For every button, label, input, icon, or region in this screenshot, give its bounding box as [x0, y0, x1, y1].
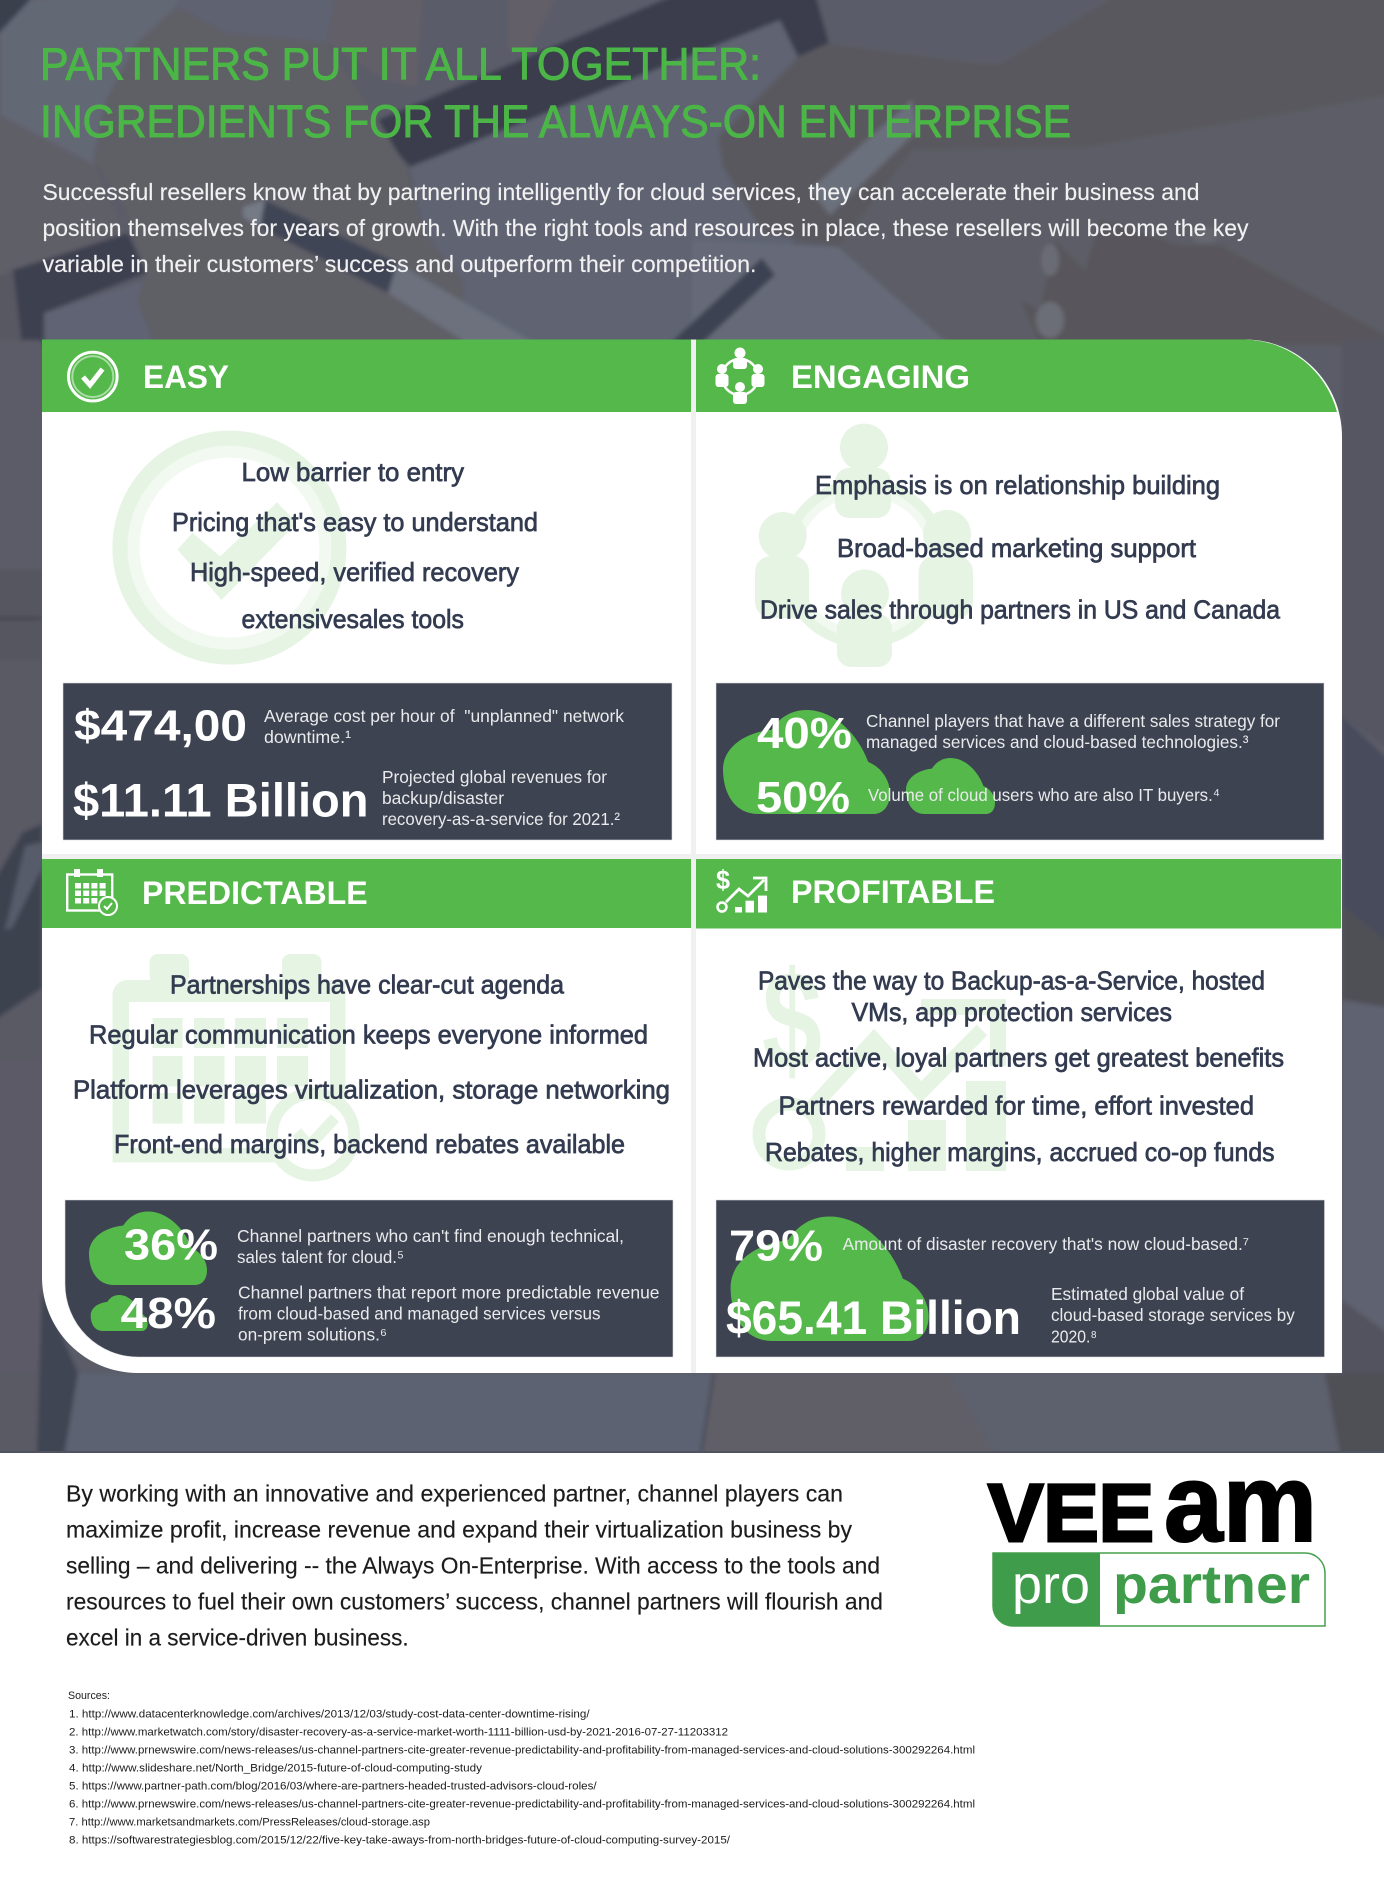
icon: large cloud — [89, 1212, 207, 1285]
predictable bullet list — [73, 970, 670, 1159]
engaging stats box — [716, 683, 1324, 840]
engaging bullet list: Drive sales through partners in US and Canada — [760, 594, 1281, 624]
stat description: sales strategy: managed services and cloud-based technologies.³ — [866, 732, 1249, 752]
white panel card — [42, 340, 1342, 1373]
panel: profitable — [696, 859, 1341, 1357]
title — [40, 38, 1071, 147]
logo: veeam pro partner: VEE — [988, 1468, 1154, 1559]
closing paragraph — [66, 1481, 883, 1651]
engaging bullet list: Emphasis is on relationship building — [815, 470, 1220, 500]
stat description: downtime — [264, 706, 624, 747]
stat description: revenues: Projected global revenues for — [382, 767, 607, 787]
panel: easy — [42, 340, 691, 840]
logo: veeam pro partner: pro — [1012, 1555, 1090, 1615]
sources list: 4. http://www.slideshare.net/North_Bridge/2015-future-of-cloud-computing-study — [69, 1762, 483, 1774]
stat: 50 percent: 50% — [756, 773, 850, 822]
stat: 36 percent: 36% — [124, 1220, 218, 1270]
panel: predictable — [42, 859, 691, 1357]
stat: 79 percent: 79% — [729, 1222, 823, 1270]
sources list: 7. http://www.marketsandmarkets.com/PressReleases/cloud-storage.asp — [69, 1816, 430, 1828]
icon: large cloud — [731, 1216, 929, 1341]
easy bullet list: Low barrier to entry — [242, 457, 464, 487]
stat description: storage value: cloud-based storage services by — [1051, 1305, 1295, 1325]
profitable bullet list: Most active, loyal partners get greatest benefits — [753, 1042, 1284, 1072]
icon: small cloud — [906, 758, 995, 814]
icon: small cloud — [91, 1295, 148, 1331]
predictable stats box — [65, 1200, 673, 1357]
engaging bullet list — [760, 470, 1281, 624]
sources list — [68, 1690, 975, 1846]
watermark: check circle — [112, 431, 346, 665]
easy header bar — [42, 340, 691, 412]
icon: large cloud — [723, 710, 890, 814]
predictable bullet list: Regular communication keeps everyone informed — [89, 1020, 648, 1050]
predictable heading: PREDICTABLE — [142, 875, 368, 911]
sources list: 6. http://www.prnewswire.com/news-releases/us-channel-partners-cite-greater-revenue-predictability-and-profitability-from-managed-services-and-cloud-solutions-300292264.html — [69, 1798, 975, 1810]
predictable bullet list: Partnerships have clear-cut agenda — [170, 970, 565, 1000]
profitable stats box — [716, 1200, 1324, 1357]
stat description: sales strategy: Channel players that have a different sales strategy for — [866, 711, 1280, 731]
easy bullet list: High-speed, verified recovery — [190, 557, 519, 587]
stat description: revenues — [382, 767, 620, 829]
stat description: predictable revenue: from cloud-based and managed services versus — [238, 1304, 601, 1324]
closing paragraph: excel in a service-driven business. — [66, 1625, 409, 1651]
stat description: predictable revenue: on-prem solutions.⁶ — [238, 1324, 387, 1344]
predictable header bar — [42, 859, 691, 928]
easy bullet list: Pricing that's easy to understand — [172, 507, 538, 537]
profitable bullet list — [753, 966, 1284, 1167]
sources list: 8. https://softwarestrategiesblog.com/2015/12/22/five-key-take-aways-from-north-bridges-future-of-cloud-computing-survey-2015/ — [69, 1834, 731, 1846]
profitable bullet list: Partners rewarded for time, effort invested — [778, 1090, 1254, 1120]
stat description: storage value — [1051, 1284, 1295, 1346]
engaging heading: ENGAGING — [791, 359, 970, 395]
margins — [0, 340, 42, 570]
icon: people circle — [716, 348, 764, 404]
stat description: technical talent — [237, 1226, 624, 1267]
title: INGREDIENTS FOR THE ALWAYS-ON ENTERPRISE — [40, 96, 1071, 147]
icon: check circle — [68, 352, 117, 401]
icon: dollar and growth chart: $ — [716, 865, 730, 895]
watermark: dollar and growth chart: $ — [762, 943, 822, 1098]
stat: 40 percent: 40% — [757, 709, 852, 758]
intro paragraph: Successful resellers know that by partnering intelligently for cloud services, they can accelerate their business and — [42, 179, 1200, 205]
profitable bullet list: VMs, app protection services — [852, 997, 1172, 1027]
logo: veeam pro partner: partner — [1113, 1555, 1310, 1615]
engaging bullet list: Broad-based marketing support — [837, 533, 1197, 563]
predictable bullet list: Front-end margins, backend rebates available — [114, 1129, 625, 1159]
stat: 11.11 billion: $11.11 Billion — [73, 774, 368, 826]
watermark: people circle — [755, 424, 973, 667]
intro paragraph: variable in their customers’ success and outperform their competition. — [42, 251, 756, 277]
sources list: 5. https://www.partner-path.com/blog/2016/03/where-are-partners-headed-trusted-advisors-cloud-roles/ — [69, 1780, 598, 1792]
icon: calendar — [67, 869, 117, 915]
profitable header bar — [696, 859, 1341, 928]
stat description: IT buyers: Volume of cloud users who are also IT buyers.⁴ — [868, 785, 1220, 805]
easy heading: EASY — [143, 359, 229, 395]
closing paragraph: selling – and delivering -- the Always On-Enterprise. With access to the tools and — [66, 1553, 880, 1579]
easy bullet list: extensivesales tools — [242, 604, 464, 634]
title: PARTNERS PUT IT ALL TOGETHER: — [40, 38, 761, 90]
easy bullet list — [172, 457, 538, 634]
predictable bullet list: Platform leverages virtualization, storage networking — [73, 1074, 670, 1104]
easy stats box — [63, 683, 672, 840]
stat description: technical talent: Channel partners who can't find enough technical, — [237, 1226, 624, 1246]
closing paragraph: By working with an innovative and experienced partner, channel players can — [66, 1481, 843, 1507]
stat description: downtime: Average cost per hour of "unplanned" network — [264, 706, 624, 726]
stat description: sales strategy — [866, 711, 1280, 752]
stat: 48 percent: 48% — [121, 1289, 216, 1338]
logo: veeam pro partner — [988, 1442, 1325, 1626]
stat description: downtime: downtime.¹ — [264, 727, 351, 747]
profitable heading: PROFITABLE — [791, 874, 995, 910]
closing paragraph: maximize profit, increase revenue and expand their virtualization business by — [66, 1517, 852, 1543]
stat description: disaster recovery: Amount of disaster recovery that's now cloud-based.⁷ — [843, 1234, 1249, 1254]
sources list: 3. http://www.prnewswire.com/news-releases/us-channel-partners-cite-greater-revenue-predictability-and-profitability-from-managed-services-and-cloud-solutions-300292264.html — [69, 1744, 975, 1756]
intro paragraph — [42, 179, 1249, 277]
stat: 65.41 billion: $65.41 Billion — [726, 1291, 1021, 1344]
sources list: 2. http://www.marketwatch.com/story/disaster-recovery-as-a-service-market-worth-1111-billion-usd-by-2021-2016-07-27-11203312 — [69, 1726, 728, 1738]
engaging header bar — [696, 340, 1337, 412]
sources list: 1. http://www.datacenterknowledge.com/archives/2013/12/03/study-cost-data-center-downtime-rising/ — [69, 1708, 591, 1720]
stat description: predictable revenue — [238, 1283, 660, 1344]
watermark: dollar and growth chart — [759, 943, 1006, 1171]
stat description: technical talent: sales talent for cloud.⁵ — [237, 1247, 404, 1267]
stat description: revenues: backup/disaster — [382, 788, 504, 808]
sources list: Sources: — [68, 1690, 110, 1702]
watermark: calendar — [112, 954, 360, 1182]
stat description: predictable revenue: Channel partners that report more predictable revenue — [238, 1283, 660, 1303]
profitable bullet list: Paves the way to Backup-as-a-Service, hosted — [758, 966, 1265, 996]
stat description: storage value: Estimated global value of — [1051, 1284, 1244, 1304]
closing paragraph: resources to fuel their own customers’ success, channel partners will flourish and — [66, 1589, 883, 1615]
intro paragraph: position themselves for years of growth. With the right tools and resources in place, these resellers will become the key — [42, 215, 1249, 241]
logo: veeam pro partner: am — [1164, 1442, 1317, 1565]
stat description: storage value: 2020.⁸ — [1051, 1326, 1097, 1346]
stat description: revenues: recovery-as-a-service for 2021.² — [382, 809, 620, 829]
icon: dollar and growth chart — [716, 865, 767, 912]
profitable bullet list: Rebates, higher margins, accrued co-op funds — [765, 1137, 1275, 1167]
stat: 474,00: $474,00 — [74, 702, 247, 750]
panel: engaging — [696, 340, 1337, 840]
